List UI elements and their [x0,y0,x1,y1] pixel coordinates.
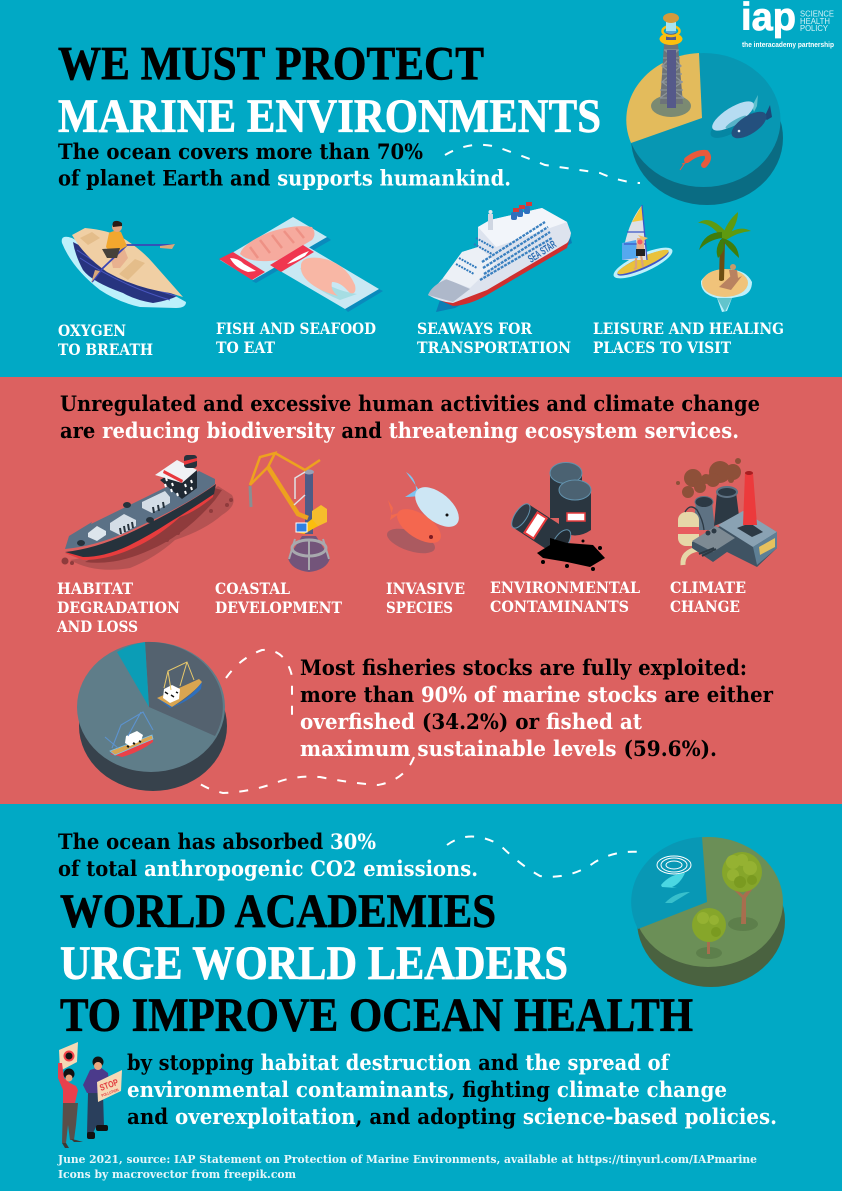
logo: iap science health policy: SCIENCE [800,10,834,18]
title: world academies urge world leaders: WORLD ACADEMIES [60,885,496,938]
label: coastal development: COASTAL [215,579,290,598]
label: fish and seafood to eat: TO EAT [216,338,275,357]
icon: invasive fish [384,472,466,558]
label: environmental contaminants [490,578,640,616]
icon: fish and seafood trays [219,217,383,312]
background: middle red band [0,377,842,804]
dashed connector: fisheries upper [226,650,292,722]
label: environmental contaminants: CONTAMINANTS [490,597,629,616]
text: by stopping habitat destruction [127,1051,777,1130]
label: leisure and healing places to visit: LEISURE AND HEALING [593,319,784,338]
icon: palm island [698,212,752,312]
label: leisure and healing places to visit [593,319,784,357]
label: invasive species: SPECIES [386,598,453,617]
label: habitat degradation and loss: HABITAT [57,579,133,598]
label: climate change: CHANGE [670,597,740,616]
label: environmental contaminants: ENVIRONMENTAL [490,578,640,597]
text: by stopping habitat destruction: environmental contaminants, fighting climate change [127,1078,727,1103]
icon: fishing boat lower [105,712,153,757]
pie chart: ocean share with oil rig and fish [626,13,783,205]
text: most fisheries stocks: overfished (34.2%) or fished at [300,710,642,735]
text: most fisheries stocks: maximum sustainable levels (59.6%). [300,737,717,762]
text: unregulated human activities [60,392,760,444]
dashed connector to carbon pie [447,836,640,877]
label: habitat degradation and loss: AND LOSS [56,617,138,636]
text: by stopping habitat destruction: and overexploitation, and adopting science-based policies. [127,1105,777,1130]
background: bottom teal band [0,804,842,1191]
icon: port crane [250,453,330,572]
icon: cruise ship: SEA STAR [526,239,559,266]
text: unregulated human activities: Unregulated and excessive human activities and climate change [60,392,760,417]
label: seaways for transportation: TRANSPORTATION [417,338,571,357]
icon: cruise ship [428,202,572,312]
icon: oil barrels and spill [508,462,605,571]
icon: windsurfer [610,205,676,284]
label: coastal development: DEVELOPMENT [215,598,342,617]
footer: source and credits: June 2021, source: IAP Statement on Protection of Marine Environments, available at https://tinyurl.com/IAPmarine [57,1152,757,1166]
text: most fisheries stocks: more than 90% of marine stocks are either [300,683,774,708]
label: habitat degradation and loss [56,579,180,636]
title: we must protect marine environments: MARINE ENVIRONMENTS [58,90,601,143]
pie chart: fisheries stocks [77,642,227,791]
panel: threats [56,453,777,636]
icon: shrimp [680,153,708,170]
icon: small tree [692,908,726,959]
text: ocean covers more than 70 percent [58,140,511,192]
icon: tanker oil spill [62,455,234,570]
text: most fisheries stocks [300,656,774,762]
label: seaways for transportation [417,319,571,357]
text: ocean covers more than 70 percent: of planet Earth and supports humankind. [58,166,511,192]
icon: protesters [58,1042,122,1148]
icon: oil rig [651,13,691,117]
icon: rowing boat [62,221,186,308]
logo: iap science health policy: POLICY [800,24,829,33]
icon: tall tree [722,852,762,931]
text: unregulated human activities: are reducing biodiversity and threatening ecosystem services. [60,419,739,444]
footer: source and credits: Icons by macrovector from freepik.com [58,1167,296,1181]
dashed connector to ocean pie [445,145,640,183]
panel: ocean services [58,202,784,359]
title: world academies urge world leaders [60,885,693,1042]
icon: factory with smoke [676,458,777,567]
text: most fisheries stocks: Most fisheries stocks are fully exploited: [300,656,747,681]
label: seaways for transportation: SEAWAYS FOR [417,319,532,338]
label: habitat degradation and loss: DEGRADATION [57,598,180,617]
text: by stopping habitat destruction: by stopping habitat destruction and the spread of [127,1051,671,1076]
title: world academies urge world leaders: URGE WORLD LEADERS [60,937,568,990]
label: fish and seafood to eat: FISH AND SEAFOOD [216,319,376,338]
label: fish and seafood to eat [216,319,376,357]
text: ocean covers more than 70 percent: The ocean covers more than 70% [58,140,423,165]
logo: iap science health policy [741,0,834,49]
text: ocean absorbed 30 percent [58,830,478,882]
title: we must protect marine environments [58,38,601,143]
icon: light and dark fish [707,95,772,143]
icon: ripples and dolphins [657,856,691,903]
label: oxygen to breath [58,321,153,359]
label: invasive species: INVASIVE [386,579,465,598]
title: world academies urge world leaders: TO IMPROVE OCEAN HEALTH [60,989,693,1042]
label: leisure and healing places to visit: PLACES TO VISIT [593,338,731,357]
text: ocean absorbed 30 percent: of total anthropogenic CO2 emissions. [58,857,478,882]
label: climate change: CLIMATE [670,578,746,597]
label: coastal development [215,579,342,617]
label: climate change [670,578,746,616]
icon: fishing boat upper [157,662,202,708]
label: invasive species [386,579,465,617]
label: oxygen to breath: TO BREATH [58,340,153,359]
icon: protesters: STOP [98,1077,120,1093]
logo: iap science health policy: HEALTH [800,17,830,26]
label: oxygen to breath: OXYGEN [58,321,126,340]
title: we must protect marine environments: WE MUST PROTECT [58,38,484,90]
icon: protesters: POLLUTION [101,1087,119,1098]
footer: source and credits [57,1152,757,1181]
text: ocean absorbed 30 percent: The ocean has absorbed 30% [58,830,376,855]
background: top teal band [0,0,842,378]
pie chart: carbon absorption with trees [631,837,785,987]
dashed connector: fisheries lower [200,757,414,793]
